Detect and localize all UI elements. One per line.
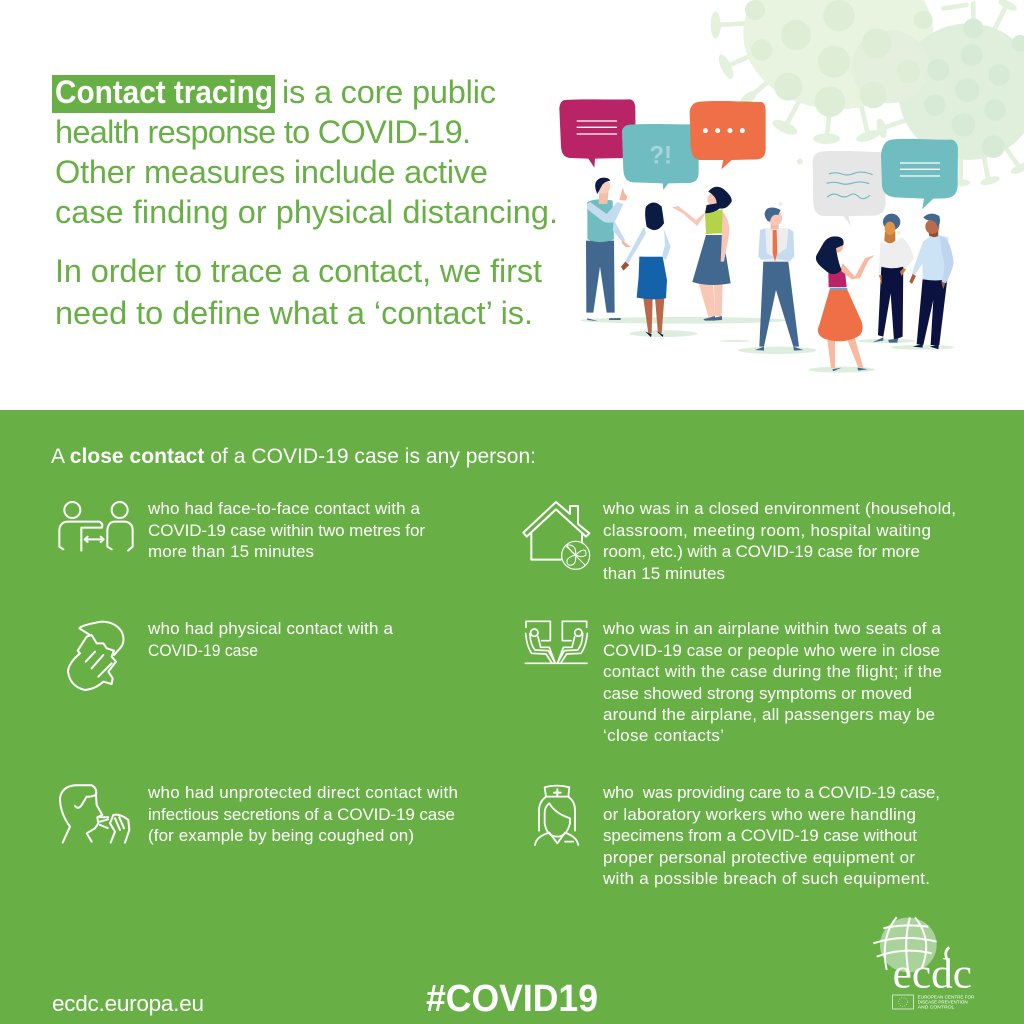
person 7 bbox=[909, 214, 954, 349]
speech bubble: orange bbox=[690, 101, 766, 169]
person 6 bbox=[873, 214, 914, 343]
panel: green close contact section bbox=[0, 410, 1024, 1024]
text: physical contact bbox=[147, 619, 394, 660]
person 1 bbox=[586, 178, 631, 321]
text: closed environment bbox=[602, 499, 956, 583]
text: care provider: proper personal protective equipment or bbox=[603, 848, 915, 867]
speech bubble: teal lines bbox=[881, 139, 958, 209]
ECDC logo: DISEASE PREVENTION bbox=[918, 999, 968, 1005]
illustration: people talking with speech bubbles bbox=[559, 99, 958, 373]
intro heading text bbox=[55, 74, 558, 331]
icon: airplane seats bbox=[525, 621, 587, 663]
text: airplane bbox=[602, 619, 942, 745]
person 2 bbox=[621, 202, 671, 337]
text: unprotected contact: (for example by being coughed on) bbox=[148, 826, 414, 845]
text: airplane: COVID-19 case or people who were in close bbox=[603, 641, 940, 660]
icon: house with ventilation fan bbox=[523, 502, 590, 569]
text: care provider: who was providing care to a COVID-19 case, bbox=[602, 783, 940, 802]
ECDC logo bbox=[873, 917, 975, 1010]
text: airplane: around the airplane, all passengers may be bbox=[603, 705, 935, 724]
text: closed environment: classroom, meeting room, hospital waiting bbox=[603, 521, 931, 540]
person 3 bbox=[672, 187, 732, 321]
text: airplane: contact with the case during the flight; if the bbox=[603, 662, 942, 681]
text: face-to-face: who had face-to-face contact with a bbox=[147, 499, 421, 518]
decoration: coronavirus particles bbox=[711, 0, 1024, 235]
ground shadows bbox=[580, 317, 954, 373]
speech bubble: teal question bbox=[622, 124, 699, 190]
text: face-to-face: more than 15 minutes bbox=[148, 542, 314, 561]
text: airplane: case showed strong symptoms or moved bbox=[603, 684, 912, 703]
text: care provider: with a possible breach of such equipment. bbox=[602, 869, 930, 888]
text: closed environment: who was in a closed environment (household, bbox=[602, 499, 956, 518]
hashtag: #COVID19 bbox=[426, 978, 598, 1020]
text: closed environment: than 15 minutes bbox=[603, 564, 725, 583]
text: airplane: ‘close contacts’ bbox=[603, 726, 724, 745]
intro heading text: need to define what a ‘contact’ is. bbox=[55, 295, 533, 331]
intro heading text: In order to trace a contact, we first bbox=[55, 253, 542, 289]
section heading: A close contact of a COVID-19 case is any person: bbox=[51, 445, 536, 468]
ECDC logo: AND CONTROL bbox=[918, 1004, 955, 1010]
text: unprotected contact: infectious secretions of a COVID-19 case bbox=[148, 805, 455, 824]
text: care provider bbox=[602, 783, 940, 888]
speech bubble: grey bbox=[813, 151, 886, 226]
text: physical contact: COVID-19 case bbox=[148, 641, 258, 660]
text: care provider: specimens from a COVID-19 case without bbox=[603, 826, 917, 845]
text: airplane: who was in an airplane within two seats of a bbox=[602, 619, 942, 638]
icon: two people face to face bbox=[59, 502, 133, 551]
intro heading text: is a core public bbox=[282, 74, 496, 110]
text: face-to-face: COVID-19 case within two metres for bbox=[148, 521, 425, 540]
text: closed environment: room, etc.) with a COVID-19 case for more bbox=[603, 542, 920, 561]
speech bubble: magenta bbox=[559, 99, 636, 168]
intro heading text: case finding or physical distancing. bbox=[55, 194, 558, 230]
intro heading text: Contact tracing bbox=[55, 74, 273, 110]
intro heading text: Other measures include active bbox=[55, 154, 488, 190]
icon: person coughing bbox=[60, 785, 129, 843]
website: ecdc.europa.eu bbox=[52, 991, 204, 1016]
icon: hands touching bbox=[68, 622, 123, 690]
highlight box behind Contact tracing bbox=[52, 75, 275, 113]
text: care provider: or laboratory workers who were handling bbox=[603, 805, 916, 824]
text: unprotected contact bbox=[147, 783, 458, 845]
text: unprotected contact: who had unprotected direct contact with bbox=[147, 783, 458, 802]
person 5 bbox=[816, 236, 875, 371]
ECDC logo: EUROPEAN CENTRE FOR bbox=[918, 994, 975, 1000]
speech bubble: teal question: ?! bbox=[649, 142, 672, 170]
ECDC logo: ecdc bbox=[893, 950, 972, 997]
text: physical contact: who had physical contact with a bbox=[147, 619, 394, 638]
icon: nurse bbox=[535, 786, 578, 845]
text: face-to-face bbox=[147, 499, 425, 561]
person 4 bbox=[755, 207, 803, 351]
intro heading text: health response to COVID-19. bbox=[55, 114, 471, 150]
